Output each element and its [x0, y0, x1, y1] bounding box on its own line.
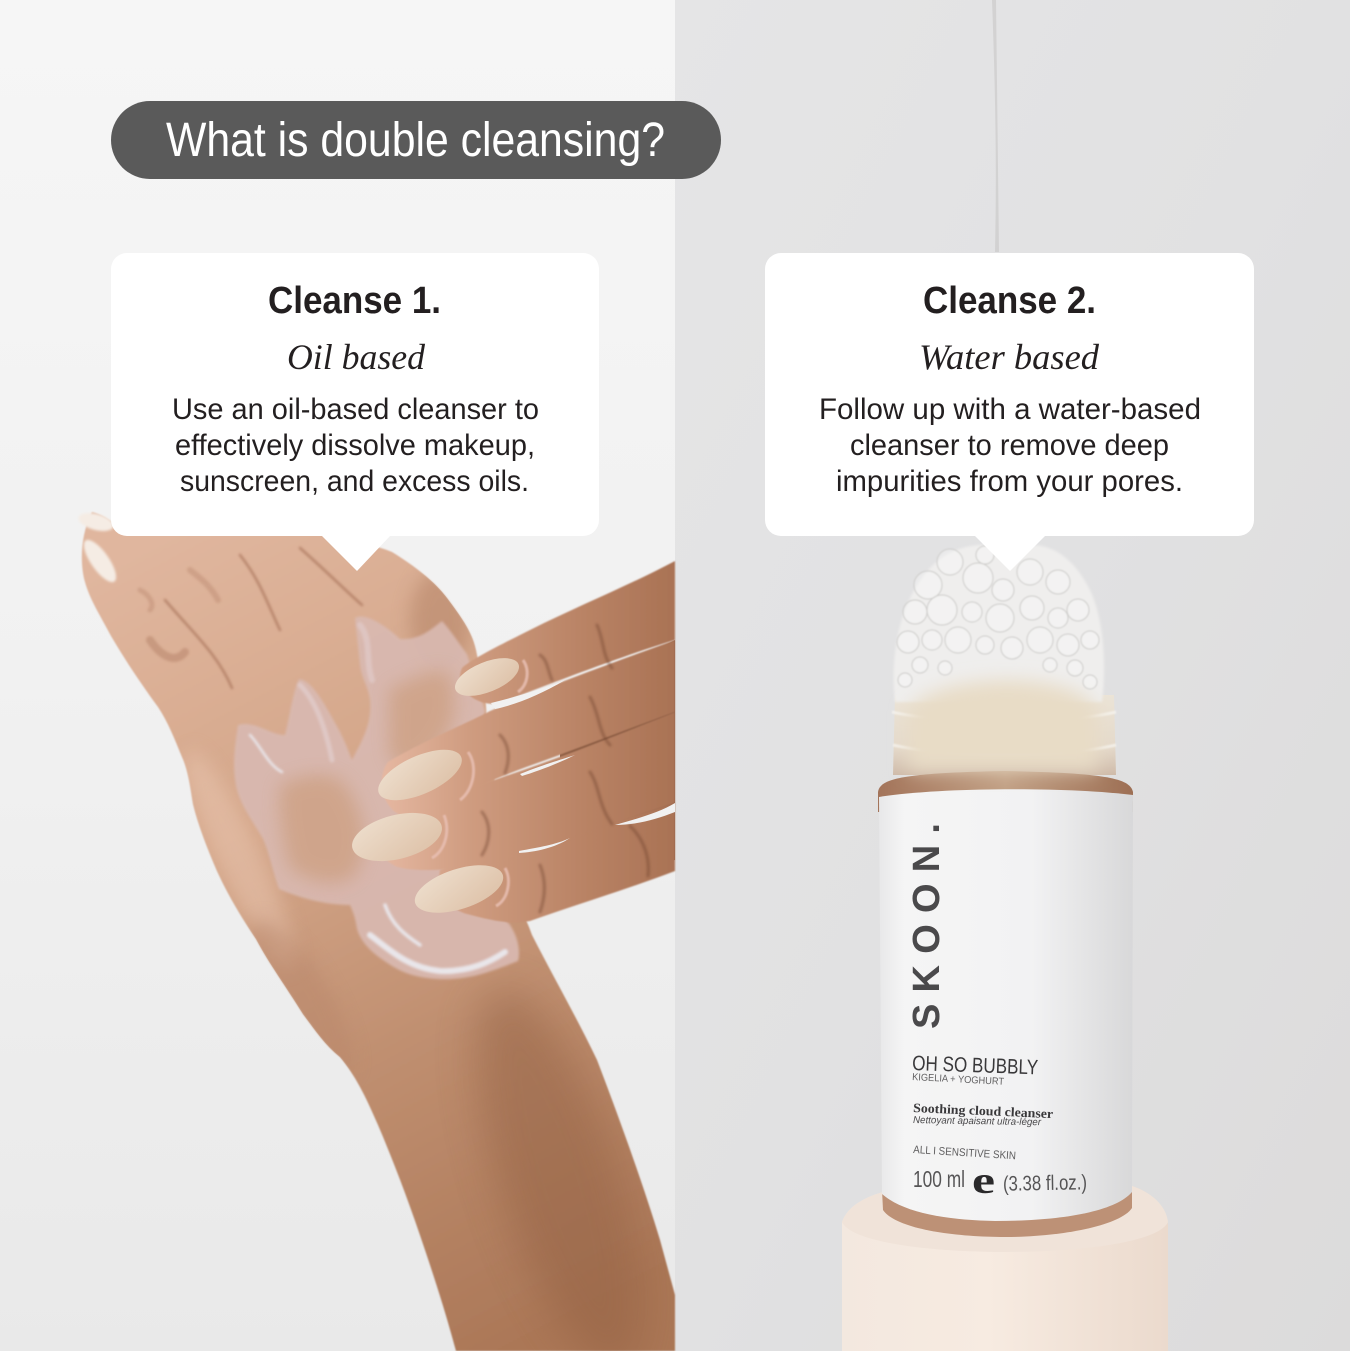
body text: cleanse 2: Follow up with a water-based — [819, 393, 1201, 426]
label brand name: SKOON. — [906, 823, 948, 1029]
label volume amount: 100 ml — [913, 1166, 965, 1192]
body text: cleanse 2 — [819, 393, 1201, 498]
dark web between fingers — [560, 640, 675, 885]
panel: cleanse 2 callout — [765, 253, 1254, 571]
foam — [894, 545, 1104, 770]
amber rim — [878, 771, 1133, 812]
callout card shape — [111, 253, 599, 571]
gap slivers between fingers — [491, 680, 675, 853]
body text: cleanse 2: impurities from your pores. — [836, 465, 1183, 498]
receiving hand and arm shape — [82, 512, 675, 1351]
foam bubbles — [897, 546, 1099, 689]
body text: cleanse 1: Use an oil-based cleanser to — [172, 393, 539, 426]
smear translucent centre — [279, 671, 455, 883]
title pill — [111, 101, 721, 179]
subheading: water based: Water based — [919, 337, 1100, 377]
neck thread highlights — [892, 712, 1116, 755]
body text: cleanse 1 — [172, 393, 539, 498]
panel: right background — [675, 0, 1350, 1351]
finger 4 — [439, 803, 675, 922]
label french description: Nettoyant apaisant ultra-léger — [913, 1115, 1042, 1128]
heading: cleanse 2: Cleanse 2. — [923, 280, 1096, 322]
bottle base amber — [882, 1188, 1132, 1237]
knuckle creases — [482, 625, 648, 912]
photo: water stream — [992, 0, 999, 252]
bottle neck — [893, 695, 1116, 775]
photo: applying hand fingers — [347, 561, 675, 922]
heading: cleanse 1: Cleanse 1. — [268, 280, 441, 322]
finger 2 — [382, 640, 675, 815]
title text: What is double cleansing? — [166, 114, 665, 167]
fingernails — [347, 650, 524, 922]
photo: hand receiving oil cleanser — [77, 510, 679, 1351]
foam body — [894, 545, 1104, 702]
finger 3 — [370, 712, 675, 870]
panel: cleanse 1 callout — [111, 253, 599, 571]
label ingredients: KIGELIA + YOGHURT — [912, 1072, 1004, 1088]
label skin type: ALL I SENSITIVE SKIN — [913, 1144, 1016, 1162]
callout card shape — [765, 253, 1254, 571]
body text: cleanse 2: cleanser to remove deep — [850, 429, 1169, 462]
oil cleanser smear — [234, 616, 519, 979]
body text: cleanse 1: effectively dissolve makeup, — [175, 429, 535, 462]
label volume in ounces: (3.38 fl.oz.) — [1003, 1171, 1087, 1196]
label estimated sign: e — [972, 1160, 995, 1202]
nails of receiving hand — [77, 510, 122, 587]
cuticles — [432, 660, 527, 906]
subheading: oil based: Oil based — [287, 337, 426, 377]
finger 1 — [460, 561, 675, 704]
label description: Soothing cloud cleanser — [913, 1100, 1054, 1121]
bottle label — [879, 789, 1133, 1221]
hand soft shading — [169, 570, 679, 1351]
photo: pedestal — [842, 1184, 1168, 1351]
finger separations — [140, 548, 362, 688]
smear highlights — [250, 625, 505, 971]
photo: foaming cleanser bottle — [878, 545, 1133, 1237]
foam tan base — [908, 680, 1098, 770]
body text: cleanse 1: sunscreen, and excess oils. — [180, 465, 529, 498]
panel: left background — [0, 0, 675, 1351]
label product name: OH SO BUBBLY — [912, 1052, 1039, 1079]
